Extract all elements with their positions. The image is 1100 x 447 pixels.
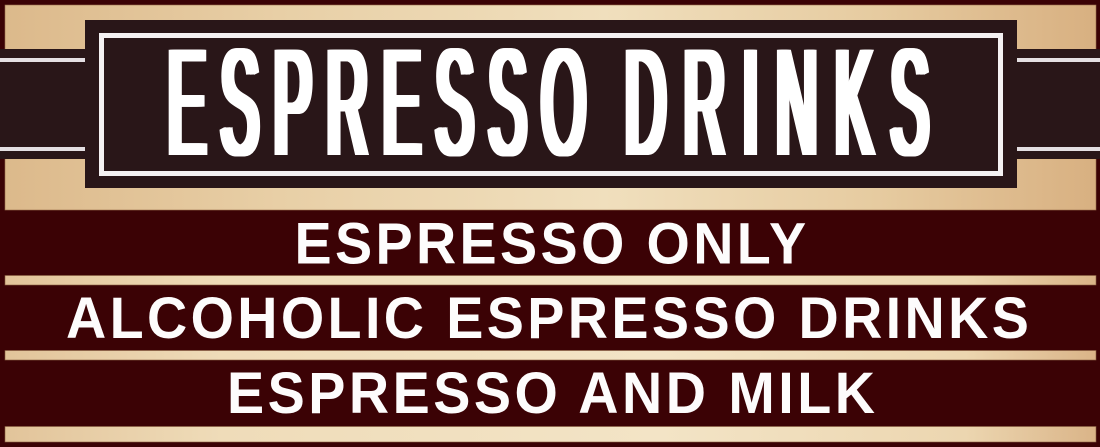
dark horizontal band [0,49,1100,159]
category: espresso and milk: ESPRESSO AND MILK [227,362,875,426]
gold header frame [5,5,1096,210]
title [164,17,942,188]
category: alcoholic espresso drinks: ALCOHOLIC ESPRESSO DRINKS [66,287,1029,351]
category: espresso only: ESPRESSO ONLY [294,212,806,277]
divider 2 [5,350,1096,360]
divider 3 [5,426,1096,442]
title plaque [85,20,1017,188]
divider 1 [5,276,1096,285]
title: ESPRESSO [164,17,596,188]
title: DRINKS [620,17,942,188]
